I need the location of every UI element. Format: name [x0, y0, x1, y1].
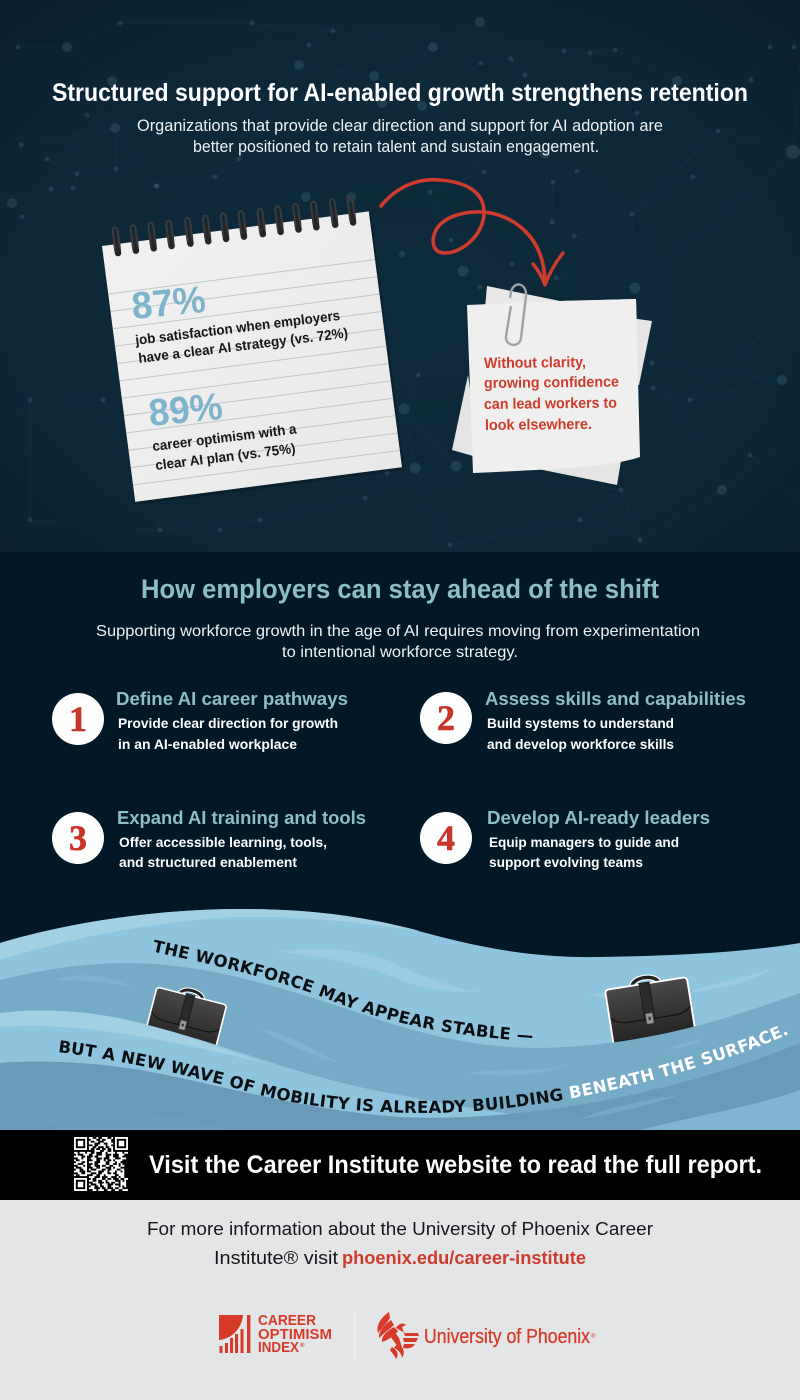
text block: career optimism — [151, 420, 297, 473]
text block: more information: For more information about the University of Phoenix Career — [147, 1219, 653, 1239]
icon: right briefcase — [604, 971, 698, 1060]
step 2: assess skills and capabilities: and develop workforce skills — [487, 736, 674, 752]
panel: employer actions background — [0, 552, 800, 952]
panel: sticky note callout — [452, 284, 652, 485]
step 1: define AI career pathways: in an AI-enabled workplace — [118, 736, 297, 752]
panel: wave illustration — [0, 909, 800, 1130]
step 2: assess skills and capabilities: 2 — [437, 698, 455, 738]
icon: phoenix bird — [377, 1312, 419, 1359]
icon: QR code — [74, 1137, 128, 1191]
step 2: assess skills and capabilities: Build systems to understand — [487, 715, 674, 731]
text: report call to action: Visit the Career Institute website to read the full report. — [149, 1151, 762, 1179]
text block: job satisfaction: job satisfaction when employers — [133, 307, 341, 348]
text block: retention intro: better positioned to retain talent and sustain engagement. — [193, 138, 599, 156]
text block: sticky note message: growing confidence — [484, 374, 619, 392]
text block: job satisfaction — [133, 307, 349, 366]
text: wave line one: THE WORKFORCE MAY APPEAR STABLE — — [154, 940, 532, 1040]
logo: Career Optimism Index: OPTIMISM — [258, 1327, 332, 1343]
step 4: develop AI-ready leaders: Equip managers to guide and — [489, 834, 679, 850]
text block: retention intro: Organizations that provide clear direction and support for AI adoption are — [137, 117, 663, 135]
logo: Career Optimism Index: CAREER — [258, 1313, 316, 1329]
logo: Career Optimism Index: INDEX — [258, 1340, 299, 1356]
text block: job satisfaction: have a clear AI strategy (vs. 72%) — [137, 324, 349, 366]
text block: sticky note message: Without clarity, — [484, 354, 586, 372]
logo: Career Optimism Index — [219, 1313, 332, 1356]
text block: career optimism: career optimism with a — [151, 420, 297, 454]
text: wave line two: BUT A NEW WAVE OF MOBILITY IS ALREADY BUILDING BENEATH THE SURFACE. — [59, 1026, 788, 1113]
text block: more information: Institute® visit — [214, 1248, 338, 1268]
text block: retention intro — [137, 117, 663, 156]
step 3: expand AI training and tools: and structured enablement — [119, 854, 297, 870]
logo: University of Phoenix: ® — [591, 1333, 596, 1340]
step 4: develop AI-ready leaders: support evolving teams — [489, 854, 643, 870]
logo: Career Optimism Index: ® — [300, 1342, 305, 1349]
icon: paperclip — [506, 284, 526, 345]
step 2: assess skills and capabilities — [420, 688, 746, 752]
step 1: define AI career pathways: 1 — [69, 699, 87, 739]
step 3: expand AI training and tools: Expand AI training and tools — [117, 807, 366, 828]
step 1: define AI career pathways — [52, 688, 348, 752]
text block: employer actions intro: to intentional workforce strategy. — [282, 644, 518, 661]
step 3: expand AI training and tools: 3 — [69, 818, 87, 858]
heading: employer actions title: How employers can stay ahead of the shift — [141, 574, 659, 604]
text block: more information: phoenix.edu/career-institute — [342, 1248, 586, 1268]
step 4: develop AI-ready leaders: Develop AI-ready leaders — [487, 807, 710, 828]
stat: 87 percent: 87% — [130, 279, 208, 328]
icon: left briefcase — [141, 982, 228, 1065]
text block: career optimism: clear AI plan (vs. 75%) — [154, 440, 296, 473]
step 3: expand AI training and tools: Offer accessible learning, tools, — [119, 834, 327, 850]
step 2: assess skills and capabilities: Assess skills and capabilities — [485, 688, 746, 709]
step 1: define AI career pathways: Provide clear direction for growth — [118, 715, 338, 731]
icon: spiral binding — [112, 197, 356, 253]
panel: retention background with network pattern — [0, 0, 800, 552]
step 4: develop AI-ready leaders: 4 — [437, 818, 455, 858]
text block: employer actions intro: Supporting workforce growth in the age of AI requires moving from experimentation — [96, 623, 700, 640]
panel: footer background — [0, 1200, 800, 1400]
text block: sticky note message: look elsewhere. — [485, 416, 592, 434]
logo: University of Phoenix — [377, 1312, 596, 1359]
stat: 89 percent: 89% — [147, 386, 225, 435]
text block: more information — [147, 1219, 653, 1268]
text block: sticky note message: can lead workers to — [484, 395, 617, 413]
heading: retention title: Structured support for AI-enabled growth strengthens retention — [52, 79, 748, 107]
text block: sticky note message — [484, 354, 619, 434]
step 3: expand AI training and tools — [52, 807, 366, 870]
step 1: define AI career pathways: Define AI career pathways — [116, 688, 348, 709]
panel: spiral notebook with statistics — [100, 194, 404, 505]
arrow: curly red arrow — [381, 180, 563, 285]
step 4: develop AI-ready leaders — [420, 807, 710, 870]
panel: report call to action bar — [0, 1130, 800, 1200]
text block: employer actions intro — [96, 623, 700, 661]
divider — [354, 1311, 355, 1360]
logo: University of Phoenix: University of Phoenix — [424, 1326, 590, 1348]
